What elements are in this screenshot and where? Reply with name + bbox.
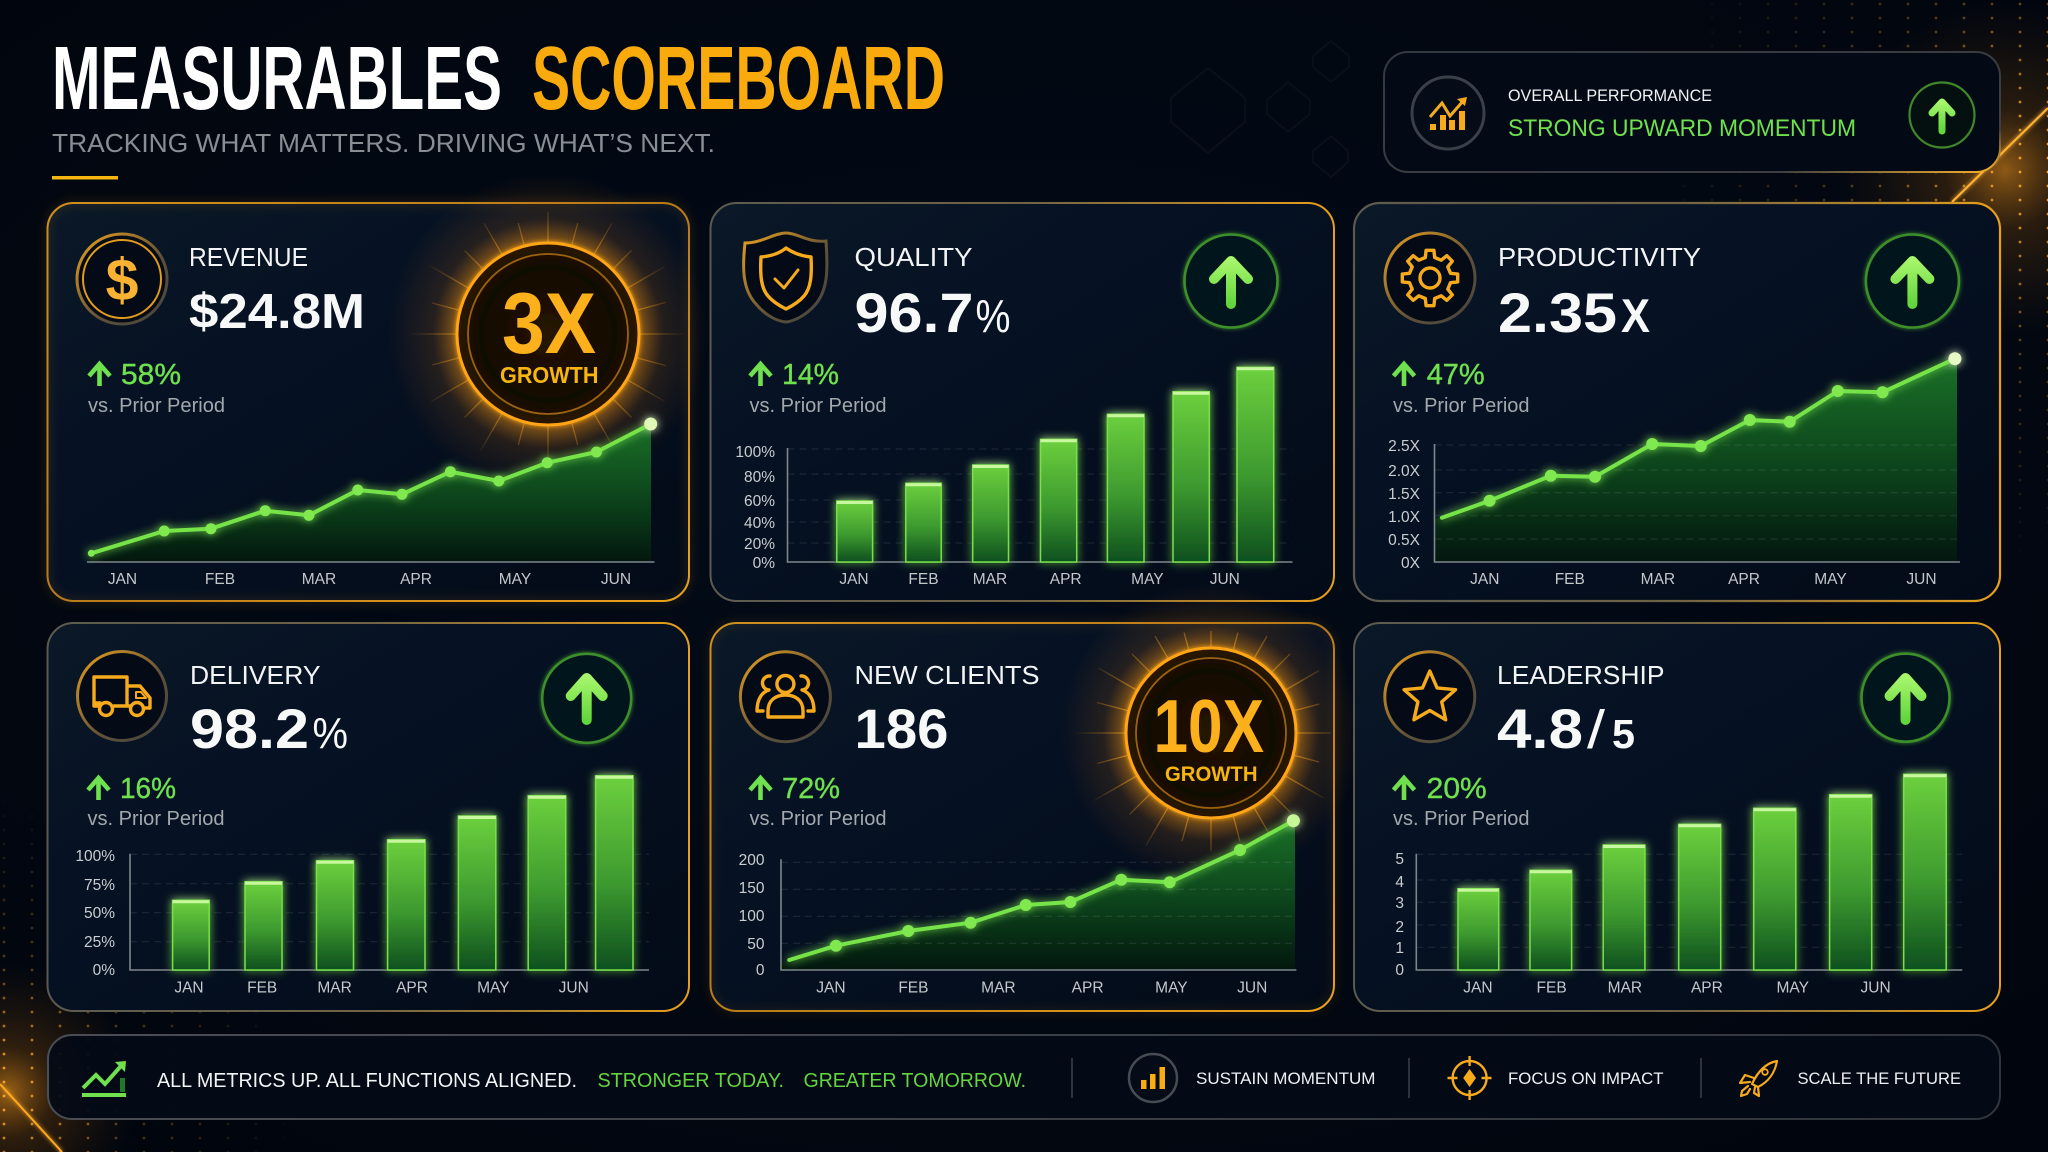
growth badge: GROWTH [500,362,598,388]
bar chart: MAY [1776,980,1809,996]
icon: trend [82,1061,126,1097]
bar chart: MAR [1608,980,1642,996]
item: sustain momentum: SUSTAIN MOMENTUM [1196,1069,1376,1088]
line chart: FEB [205,571,235,588]
change: 14% [782,359,839,391]
metric label: REVENUE [189,242,308,272]
icon: up arrow [1910,82,1974,148]
bar chart: JAN [174,980,204,996]
halo and rays [1061,583,1361,883]
line chart: JAN [1470,571,1499,588]
growth badge: 10X [1154,684,1264,768]
bar chart: 2 [1395,919,1404,936]
icon: up arrow [1866,234,1959,328]
change: 20% [1427,773,1487,805]
metric value [854,281,1010,344]
panel: revenue [48,174,708,601]
growth badge [1126,648,1296,818]
bar chart: FEB [247,980,277,996]
line chart: FEB [898,980,928,996]
bar chart: MAR [317,980,352,996]
line chart: 2.0X [1388,463,1421,480]
change: vs. Prior Period [750,395,886,417]
metric label: LEADERSHIP [1497,660,1664,690]
line chart: 0.5X [1388,532,1421,549]
decorative corner glow: bottom left [0,815,258,1152]
bar chart: 50% [84,905,115,922]
metric label: PRODUCTIVITY [1498,242,1701,272]
line chart: MAY [499,571,531,588]
message: STRONGER TODAY. [598,1070,784,1092]
bar chart: MAR [973,571,1007,588]
bar chart: 60% [744,493,775,510]
growth badge [457,243,639,425]
line chart: 1.5X [1388,486,1421,503]
hexagon decoration [1171,41,1349,177]
metric value: % [312,709,348,758]
metric value: 5 [1612,711,1635,757]
line chart: MAY [1814,571,1847,588]
bar chart: 80% [744,469,775,486]
metric value [1497,697,1635,760]
bar chart: 75% [84,877,115,894]
panel: leadership [1354,623,2000,1011]
bar chart: 5 [1395,851,1404,868]
line chart: MAR [302,571,336,588]
line chart: JUN [1906,571,1937,588]
title: MEASURABLES [52,29,502,129]
line chart [1388,352,1961,588]
bar chart: APR [1050,571,1082,588]
icon: up arrow [542,654,631,743]
line chart: 200 [739,852,765,869]
line chart: JUN [1237,980,1267,996]
bar chart: MAY [1131,571,1164,588]
message: GREATER TOMORROW. [804,1070,1026,1092]
change: vs. Prior Period [88,395,225,417]
metric label: NEW CLIENTS [854,660,1040,690]
line chart [739,814,1300,996]
metric value [190,697,348,760]
bar chart: FEB [1537,980,1567,996]
bar chart: JUN [1210,571,1240,588]
bar chart: 20% [744,536,775,553]
icon: gear [1385,233,1475,323]
title: SCOREBOARD [532,29,945,129]
line chart: FEB [1555,571,1585,588]
line chart: 50 [747,936,765,953]
decorative corner glow: top right [1682,2,2048,538]
halo and rays [388,174,708,494]
bar chart: MAY [477,980,510,996]
item: scale the future: SCALE THE FUTURE [1798,1069,1961,1088]
icon: performance chart [1412,77,1484,149]
bar chart: JUN [1861,980,1891,996]
icon: up arrow [1184,234,1278,328]
bar chart: 0 [1395,962,1404,979]
bar chart: FEB [908,571,939,588]
metric value: 98.2 [190,697,309,760]
metric label: DELIVERY [190,660,320,690]
line chart: 0X [1401,555,1421,572]
bar chart: 0% [753,555,775,572]
change: 47% [1427,359,1485,391]
change [88,773,224,830]
line chart: 100 [739,908,765,925]
label: OVERALL PERFORMANCE [1508,86,1712,105]
item: scale the future [1740,1061,1961,1096]
metric value: $24.8M [189,285,365,339]
message [157,1070,1026,1092]
message: ALL METRICS UP. ALL FUNCTIONS ALIGNED. [157,1070,577,1092]
icon: dollar [77,234,167,324]
icon: shield [744,233,827,322]
change: 16% [120,773,176,805]
metric label: QUALITY [854,242,972,272]
bar chart [1395,774,1962,996]
icon: people [740,652,830,742]
bar chart: JAN [1463,980,1493,996]
panel: overall performance [1384,52,2000,172]
line chart: JAN [108,571,137,588]
bar chart: 3 [1395,895,1404,912]
change [1393,359,1530,417]
metric value: 4.8 [1497,697,1583,760]
bar chart: APR [396,980,428,996]
change [750,773,886,830]
change: vs. Prior Period [1393,808,1530,830]
icon: dollar: $ [106,247,138,313]
line chart: APR [1072,980,1104,996]
panel: productivity [1354,203,2000,601]
change: vs. Prior Period [1393,395,1530,417]
growth badge: 3X [502,276,596,372]
bar chart: JAN [839,571,869,588]
status: STRONG UPWARD MOMENTUM [1508,115,1856,142]
change [88,359,225,417]
bar chart [75,776,649,996]
metric value: 2.35 [1498,281,1617,344]
change: vs. Prior Period [88,808,224,830]
bar chart: 100% [75,848,115,865]
bar chart: 0% [93,962,115,979]
line chart: MAR [981,980,1016,996]
footer bar [48,1035,2000,1119]
line chart: MAR [1641,571,1675,588]
metric value: % [976,290,1010,342]
bar chart: 25% [84,934,115,951]
line chart: MAY [1155,980,1188,996]
panel: delivery [48,623,689,1011]
line chart: JAN [816,980,846,996]
icon: star [1385,652,1475,742]
icon: up arrow [1862,654,1950,742]
bar chart: 1 [1395,940,1404,957]
bar chart: JUN [559,980,589,996]
line chart: 0 [756,962,765,979]
item: sustain momentum [1129,1054,1376,1102]
bar chart: 4 [1395,874,1404,891]
panel: new clients [710,583,1361,1011]
line chart: APR [1728,571,1760,588]
icon: truck [78,652,166,740]
change [1393,773,1530,830]
change: 58% [121,359,181,391]
subtitle: TRACKING WHAT MATTERS. DRIVING WHAT’S NEXT. [52,128,715,158]
item: focus on impact [1448,1056,1664,1100]
bar chart [735,367,1292,588]
metric value: / [1587,700,1605,760]
item: focus on impact: FOCUS ON IMPACT [1508,1069,1664,1088]
change: 72% [782,773,840,805]
line chart: 2.5X [1388,438,1421,455]
panel: quality [710,203,1334,601]
line chart [87,418,657,588]
metric value: X [1621,289,1650,342]
growth badge: GROWTH [1165,763,1258,786]
change: vs. Prior Period [750,808,886,830]
metric value: 96.7 [854,281,974,344]
metric value: 186 [854,697,948,760]
line chart: 1.0X [1388,509,1421,526]
line chart: APR [400,571,432,588]
bar chart: APR [1691,980,1723,996]
line chart: JUN [601,571,631,588]
change [750,359,886,417]
bar chart: 40% [744,515,775,532]
line chart: 150 [739,880,765,897]
title accent rule [52,176,118,180]
bar chart: 100% [735,444,775,461]
